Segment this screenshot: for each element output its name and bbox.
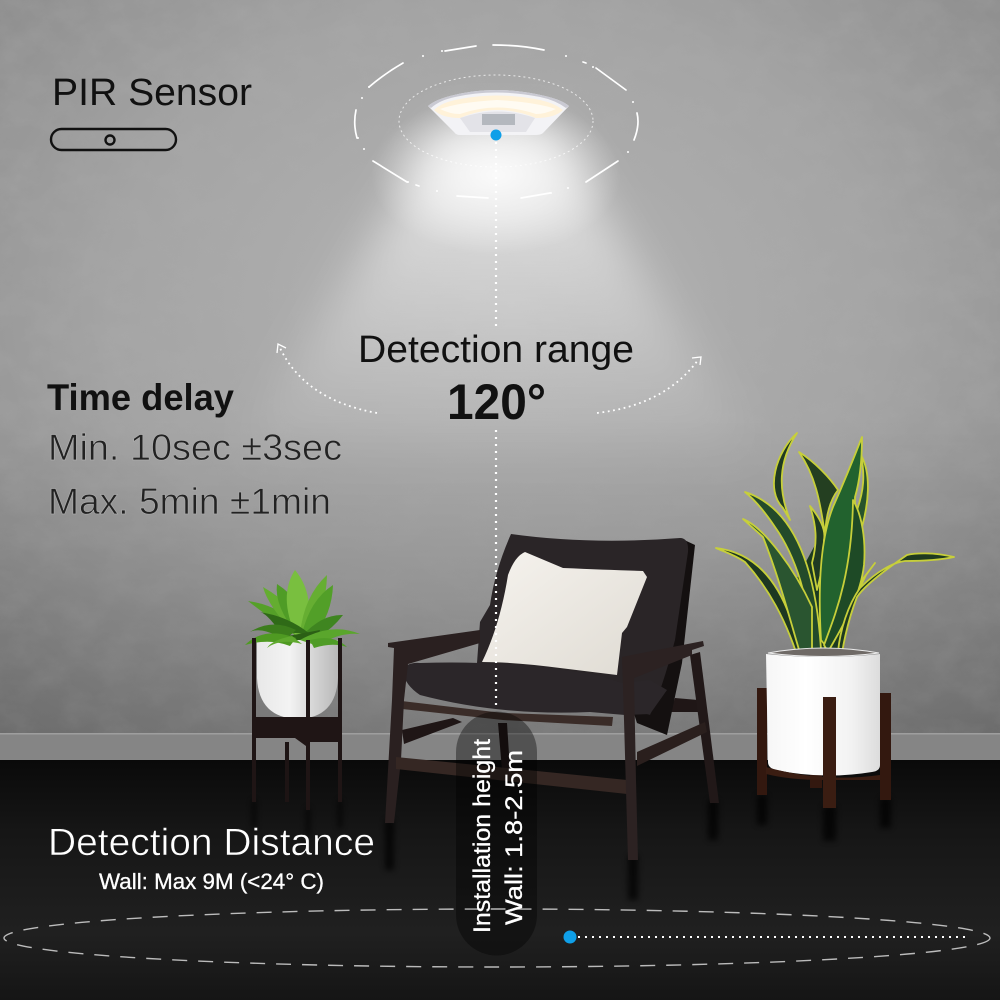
detection range label: Detection range <box>358 329 634 371</box>
detection distance text <box>48 822 375 894</box>
plant stand <box>252 638 342 810</box>
chair back stretcher and leg <box>402 698 698 770</box>
time delay text: Max. 5min ±1min <box>48 481 331 522</box>
large plant in pot <box>716 433 954 808</box>
chair right arm and front leg <box>622 641 704 860</box>
detection range label: 120° <box>447 374 546 430</box>
installation height text: Installation height <box>469 739 496 933</box>
floor <box>0 760 1000 1000</box>
baseboard <box>0 733 1000 760</box>
plant stand back leg <box>285 742 289 802</box>
light cone from lamp <box>225 95 770 470</box>
outer dashed detection ring <box>355 45 638 198</box>
seat frame <box>393 700 613 726</box>
time delay text: Min. 10sec ±3sec <box>48 427 342 468</box>
blue distance dot <box>564 930 576 944</box>
furniture floor reflections <box>252 795 891 900</box>
back cushion <box>477 534 688 715</box>
wall background <box>0 0 1000 760</box>
large white pot <box>766 654 880 776</box>
small pot <box>257 640 338 719</box>
pillow <box>482 552 647 675</box>
seat cushion <box>403 663 667 715</box>
label: PIR Sensor: PIR Sensor <box>52 72 252 114</box>
chair side stretcher <box>637 722 707 766</box>
small plant leaves <box>248 570 343 645</box>
vertical dotted line <box>495 142 497 708</box>
chair left arm and front leg <box>385 630 480 823</box>
sensor lamp with range rings <box>355 45 638 198</box>
arrow: left range arc <box>277 344 377 413</box>
label: PIR Sensor <box>51 72 252 150</box>
installation height text: Wall: 1.8-2.5m <box>501 750 528 925</box>
installation height pill <box>456 712 537 956</box>
detection distance text: Wall: Max 9M (<24° C) <box>99 869 324 894</box>
chair right back leg <box>690 652 719 803</box>
time delay text: Time delay <box>47 377 234 418</box>
time delay text <box>47 377 342 522</box>
pot soil rim <box>768 648 879 656</box>
armchair <box>385 534 719 860</box>
blue sensor dot <box>490 130 502 140</box>
icon: PIR sensor strip <box>51 129 176 150</box>
inner dotted ring <box>399 75 593 167</box>
snake plant leaves <box>716 433 954 653</box>
detection range label <box>358 329 634 430</box>
chair back frame <box>610 538 695 735</box>
plant stand front <box>766 697 880 808</box>
installation height text <box>469 739 528 933</box>
arrow: right range arc <box>597 357 701 413</box>
detection distance text: Detection Distance <box>48 822 375 864</box>
detection floor ellipse <box>4 909 990 967</box>
plant stand back <box>757 688 891 800</box>
lamp body <box>428 90 569 135</box>
small plant on stand <box>245 570 360 810</box>
chair front stretcher <box>396 757 627 794</box>
ring tick dots <box>357 50 634 194</box>
drooping leaves over pot <box>245 629 360 648</box>
dotted radius line <box>578 936 968 938</box>
